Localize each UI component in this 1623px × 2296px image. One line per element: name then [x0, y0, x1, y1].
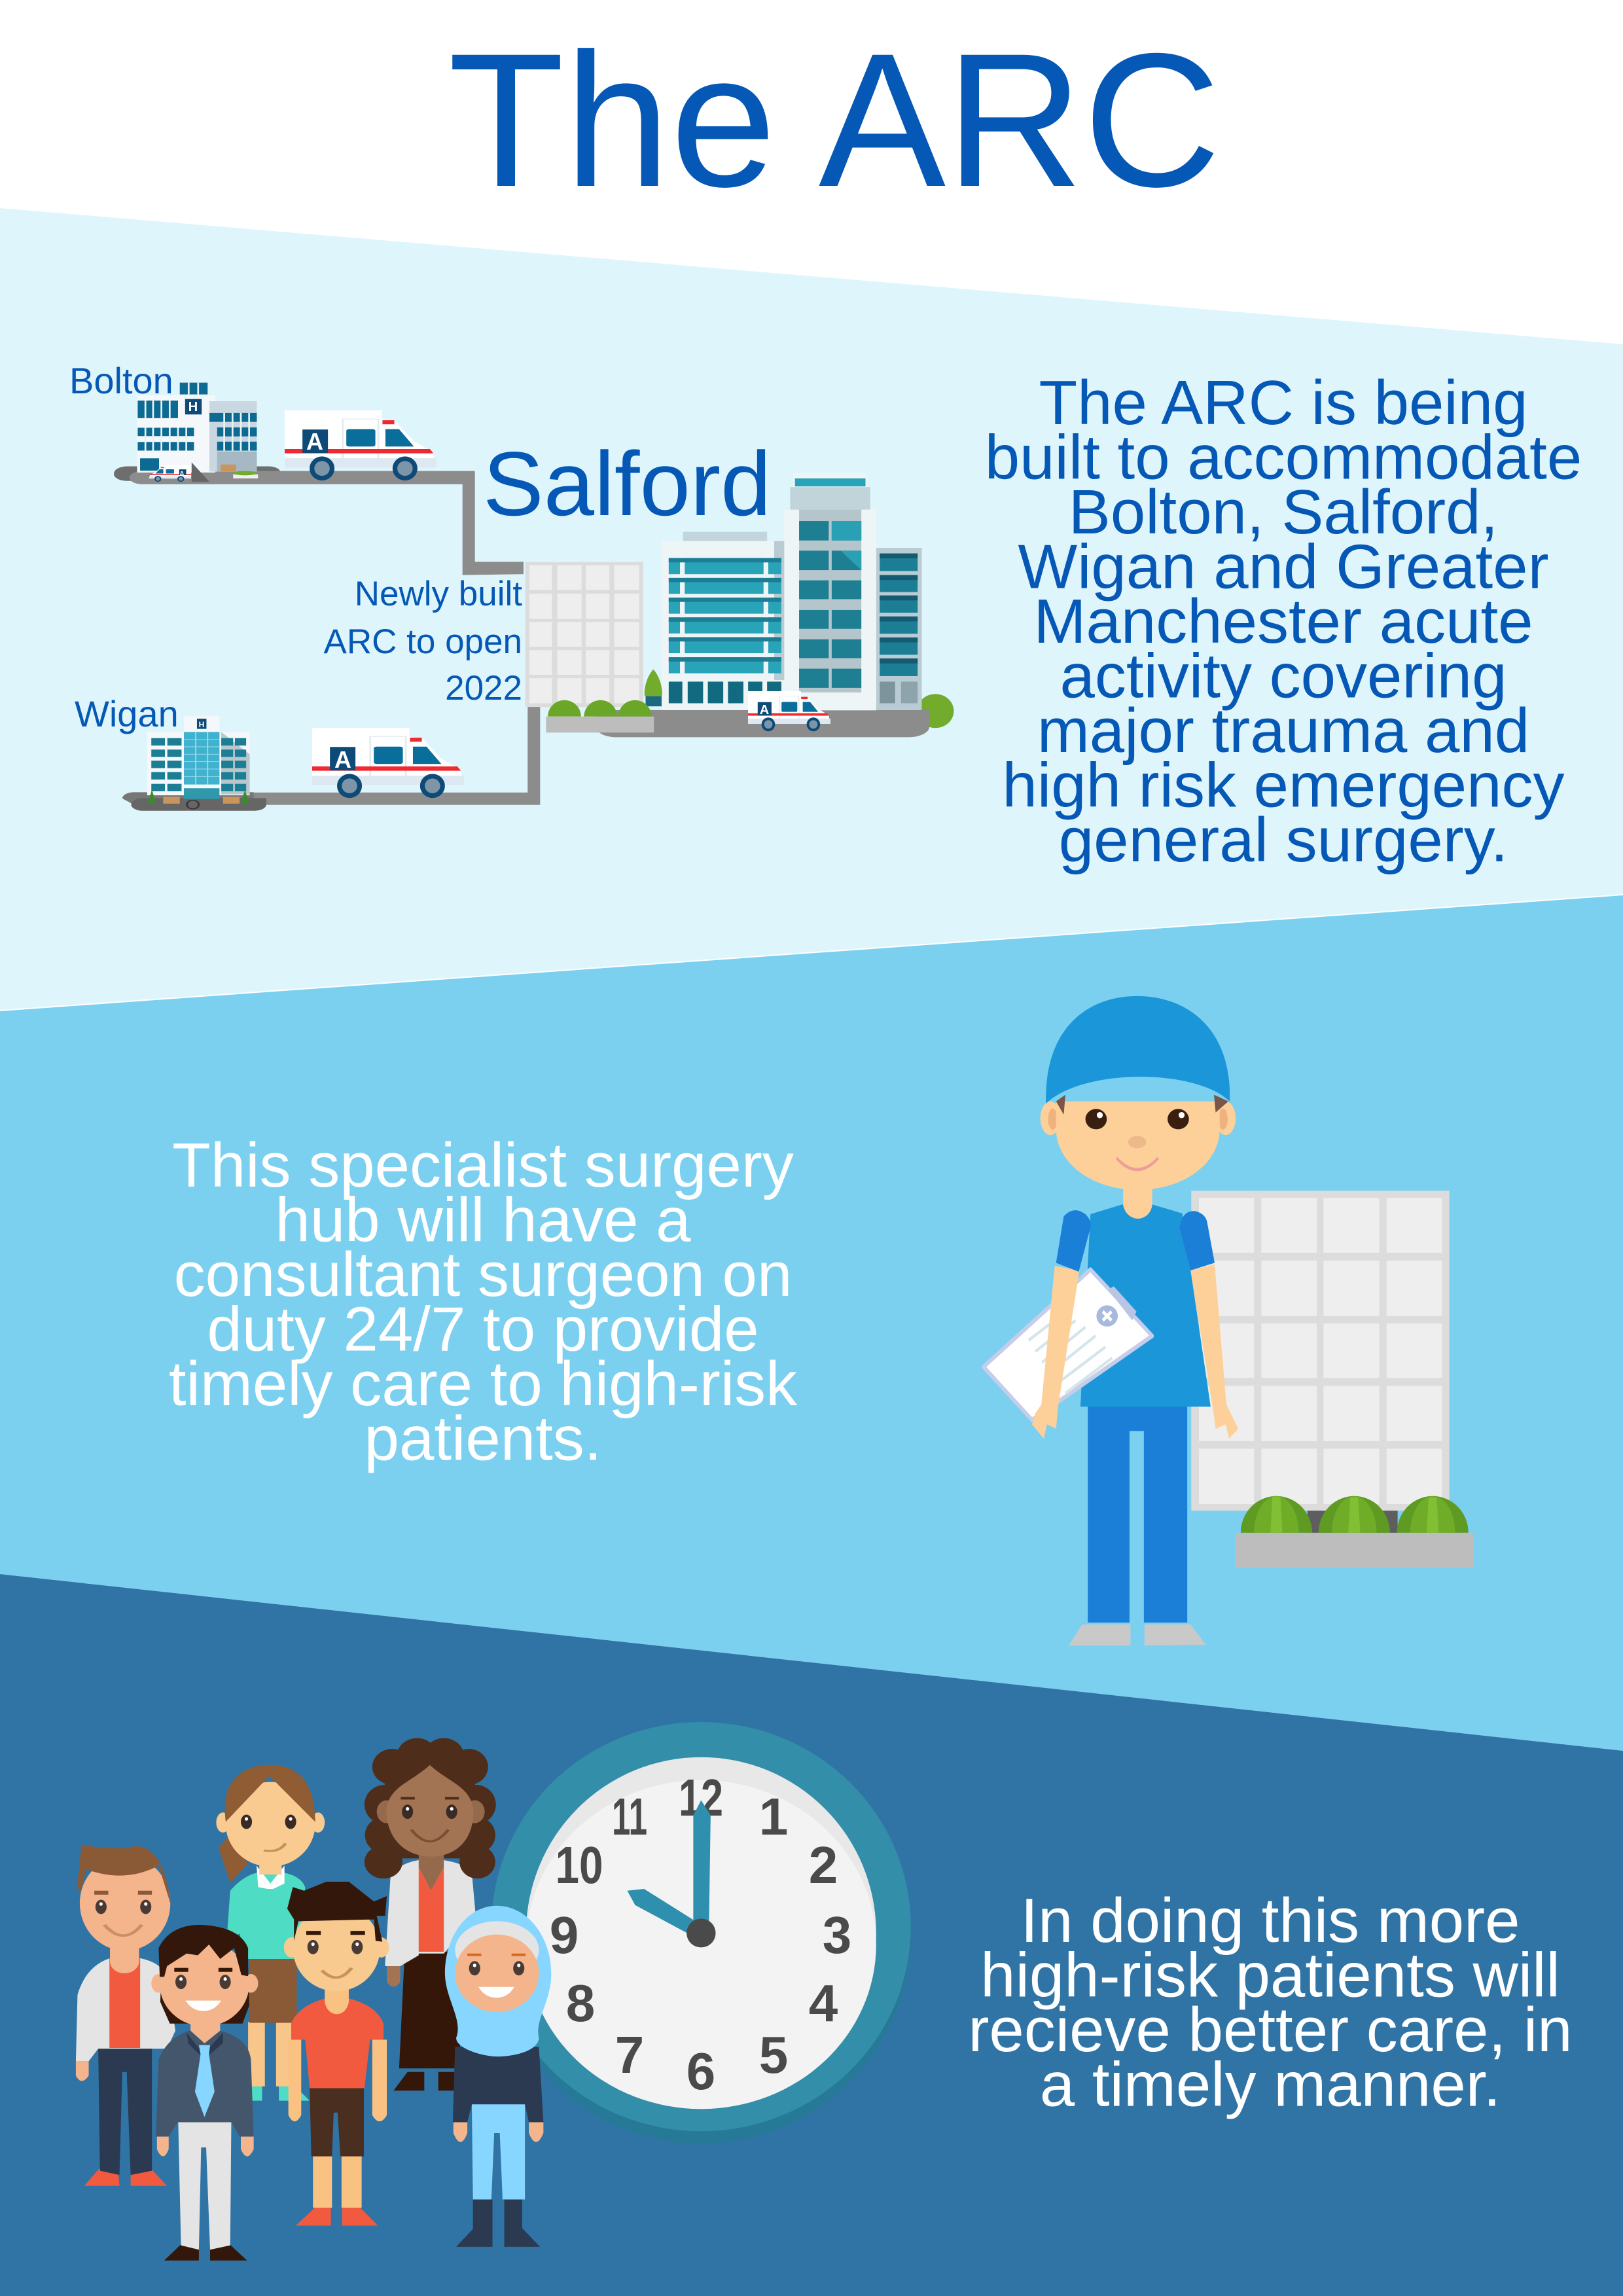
text: what the ARC is: general surgery.	[1059, 805, 1508, 875]
text: consultant surgeon: hub will have a	[275, 1185, 691, 1255]
illustration: Salford ARC hospital complex	[526, 473, 954, 737]
icon: clock	[491, 1722, 911, 2144]
marker letters on vehicles and buildings: H	[199, 720, 204, 729]
person: woman with curly hair	[365, 1738, 496, 2090]
illustration: group of six people	[76, 1738, 551, 2261]
person: woman in hijab	[445, 1906, 551, 2247]
panel: specialist surgery hub	[0, 895, 1623, 1751]
band: pale blue background	[0, 208, 1623, 1011]
text: consultant surgeon: consultant surgeon on	[174, 1240, 792, 1310]
illustration: surgeon holding clipboard	[984, 996, 1238, 1645]
text: what the ARC is	[985, 368, 1582, 875]
icon: clock: 5	[759, 2026, 788, 2084]
text: better care outcome: recieve better care, in	[968, 1995, 1573, 2065]
marker letters on vehicles and buildings: A	[306, 428, 323, 455]
icon: clock: 6	[687, 2042, 715, 2100]
marker letters on vehicles and buildings: A	[179, 471, 185, 478]
illustration: Bolton hospital	[137, 383, 258, 482]
text: what the ARC is: major trauma and	[1037, 696, 1529, 766]
title: The ARC	[448, 14, 1221, 226]
icon: clock: 2	[809, 1836, 838, 1894]
marker letters on vehicles and buildings	[179, 400, 769, 773]
text: better care outcome: a timely manner.	[1040, 2050, 1501, 2119]
icon: clock: 7	[615, 2026, 644, 2084]
icon: clock: 9	[550, 1906, 579, 1964]
text: consultant surgeon: This specialist surgery	[172, 1130, 794, 1200]
icon: clock: 10	[555, 1836, 603, 1894]
label: opening date: ARC to open	[324, 622, 522, 661]
icon: clock: 12	[679, 1768, 723, 1827]
text: what the ARC is: high risk emergency	[1002, 750, 1565, 821]
band: dark blue background	[0, 1574, 1623, 2296]
panel: better care	[0, 1574, 1623, 2296]
diagram: roads from Bolton and Wigan to Salford	[114, 467, 540, 811]
icon: Bolton ambulance	[285, 410, 437, 480]
illustration: hospital block with planter	[1191, 1191, 1473, 1568]
person: man in grey jacket	[76, 1845, 175, 2186]
marker letters on vehicles and buildings: A	[334, 746, 351, 773]
icon: clock: 4	[809, 1974, 838, 2032]
icon: clock: 8	[566, 1974, 595, 2032]
text: consultant surgeon	[169, 1130, 798, 1474]
text: what the ARC is: activity covering	[1060, 641, 1507, 711]
text: what the ARC is: built to accommodate	[985, 423, 1582, 492]
text: better care outcome: high-risk patients will	[980, 1940, 1560, 2011]
label: Bolton: Bolton	[69, 360, 173, 401]
label: Salford: Salford	[483, 433, 771, 535]
panel: hospital network	[0, 208, 1623, 1011]
icon: small ambulance at Bolton	[149, 465, 191, 482]
text: consultant surgeon: duty 24/7 to provide	[207, 1295, 759, 1364]
person: boy in red shirt	[284, 1882, 389, 2226]
person: woman in teal top	[216, 1765, 325, 2101]
marker letters on vehicles and buildings: A	[760, 703, 769, 717]
person: man with tie	[151, 1925, 258, 2261]
text: better care outcome: In doing this more	[1020, 1886, 1520, 1956]
text: consultant surgeon: patients.	[365, 1403, 601, 1474]
illustration: Wigan hospital	[147, 716, 250, 809]
text: what the ARC is: The ARC is being	[1039, 368, 1528, 438]
text: what the ARC is: Wigan and Greater	[1018, 531, 1549, 602]
icon: clock: 1	[759, 1787, 788, 1846]
text: better care outcome	[968, 1886, 1573, 2119]
icon: clock: 11	[612, 1787, 647, 1846]
label: Wigan: Wigan	[75, 693, 179, 734]
icon: Salford ambulance	[748, 691, 830, 731]
text: consultant surgeon: timely care to high-risk	[169, 1349, 798, 1419]
band: sky blue background	[0, 895, 1623, 1751]
marker letters on vehicles and buildings: H	[188, 400, 198, 414]
text: what the ARC is: Bolton, Salford,	[1069, 477, 1498, 547]
label: opening date	[324, 575, 522, 708]
label: opening date: Newly built	[355, 575, 522, 613]
text: what the ARC is: Manchester acute	[1033, 586, 1533, 656]
icon: Wigan ambulance	[312, 728, 464, 798]
icon: clock: 3	[823, 1906, 851, 1964]
label: opening date: 2022	[445, 669, 522, 708]
